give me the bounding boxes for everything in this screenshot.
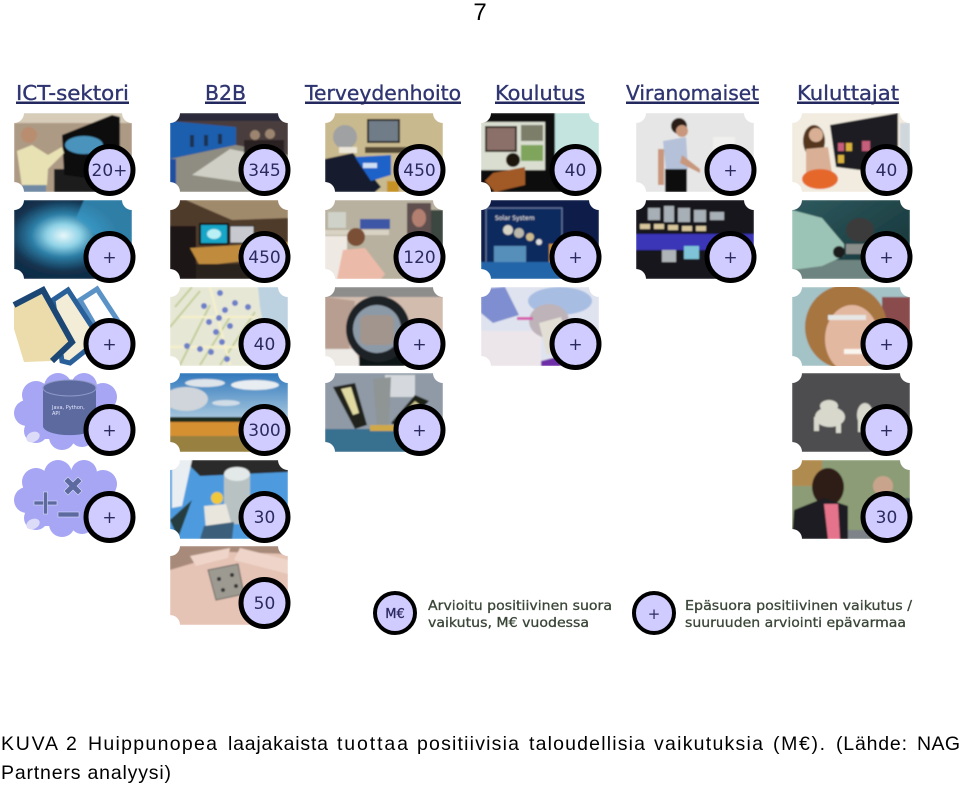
legend badge: plus (634, 593, 674, 633)
column: Viranomaiset (626, 81, 759, 280)
badge: plus: + (102, 508, 117, 528)
caption: laajakaista (228, 733, 328, 755)
tile: database cloud (14, 373, 133, 454)
heading: Terveydenhoito: Terveydenhoito (304, 81, 461, 105)
badge: plus: + (102, 421, 117, 441)
column: ICT-sektori (14, 81, 133, 540)
tile: video consultation, 450 (325, 113, 443, 194)
badge: 300: 300 (248, 421, 281, 441)
legend text: indirect impact: Epäsuora positiivinen vaikutus / (685, 598, 912, 614)
legend badge: M€ (375, 593, 415, 633)
tile: solar system screen: Solar System (495, 215, 535, 222)
heading: Viranomaiset: Viranomaiset (626, 81, 759, 105)
heading: ICT-sektori: ICT-sektori (16, 81, 129, 105)
badge: 40: 40 (254, 335, 275, 355)
badge: plus: + (412, 421, 427, 441)
tile: chip in palm, 50 (170, 546, 288, 626)
badge: plus: + (568, 335, 583, 355)
tile: lab researcher (481, 287, 599, 368)
legend text: direct impact: vaikutus, M€ vuodessa (428, 615, 589, 631)
caption: Partners analyysi) (1, 762, 171, 784)
badge: 120: 120 (403, 248, 436, 268)
badge: 450: 450 (403, 161, 436, 181)
legend text: direct impact (428, 598, 612, 631)
legend text: indirect impact: suuruuden arviointi epävarmaa (685, 615, 906, 631)
caption: NAG (917, 733, 960, 755)
legend text: indirect impact (685, 598, 912, 631)
heading: Kuluttajat: Kuluttajat (797, 81, 899, 105)
badge: plus: + (879, 335, 894, 355)
tile: surgical robot (325, 373, 443, 454)
column: Kuluttajat (792, 81, 910, 540)
tile: control room (636, 200, 754, 280)
badge: plus: + (723, 161, 738, 181)
tile: data tunnel (14, 200, 133, 280)
tile: field and sky, 300 (164, 373, 288, 454)
tile: math cloud (14, 460, 133, 540)
badge: plus: + (412, 335, 427, 355)
caption: (Lähde: (836, 733, 907, 755)
tile: woman with smart TV, 40 (792, 113, 910, 194)
badge: plus: + (102, 335, 117, 355)
tile: hospital patient, 120 (325, 200, 443, 280)
column: B2B (164, 81, 288, 626)
tile: map with pins, 40 (170, 287, 288, 368)
badge: 450: 450 (248, 248, 281, 268)
heading: B2B: B2B (205, 81, 246, 105)
tile: operator desk, 450 (170, 200, 288, 280)
badge: plus: + (879, 421, 894, 441)
column: Terveydenhoito (304, 81, 461, 454)
tile: speeding car (792, 200, 910, 280)
tile: documents icon (14, 289, 133, 368)
caption: vaikutuksia (654, 733, 763, 755)
legend badge: plus: + (648, 605, 660, 623)
badge: 345: 345 (248, 161, 281, 181)
tile: video conference room, 345 (170, 113, 288, 194)
tile: database cloud: API (52, 411, 60, 417)
heading: Koulutus: Koulutus (495, 81, 585, 105)
legend badge: M€: M€ (385, 607, 405, 622)
caption: Huippunopea (88, 733, 217, 755)
tile: 3D printed figures (792, 373, 910, 454)
tile: man at display, 20+ (14, 113, 133, 194)
tile: heart-rate watch (325, 287, 443, 368)
tile: database cloud: Java, Python, (51, 405, 85, 411)
caption: 2 (66, 733, 77, 755)
tile: woman with smart glasses (792, 285, 910, 373)
badge: 30: 30 (876, 508, 897, 528)
badge: plus: + (568, 248, 583, 268)
badge: 50: 50 (254, 594, 275, 614)
caption: KUVA (1, 733, 58, 755)
tile: industrial worker, 30 (170, 460, 288, 540)
caption: taloudellisia (529, 733, 645, 755)
caption: tuottaa (337, 733, 408, 755)
badge: 20+: 20+ (92, 161, 127, 181)
caption (1, 733, 960, 784)
badge: 40: 40 (876, 161, 897, 181)
badge: plus: + (723, 248, 738, 268)
tile: presenter woman (636, 113, 754, 194)
badge: plus: + (879, 248, 894, 268)
caption: (M€). (773, 733, 825, 755)
badge: 40: 40 (565, 161, 586, 181)
caption: positiivisia (417, 733, 519, 755)
legend (375, 593, 912, 633)
tile: solar system screen (481, 200, 599, 280)
tile: remote classroom, 40 (481, 113, 599, 194)
column: Koulutus (481, 81, 599, 368)
tile: two people with tablet, 30 (792, 460, 910, 540)
badge: plus: + (102, 248, 117, 268)
legend text: direct impact: Arvioitu positiivinen suora (428, 598, 612, 614)
badge: 30: 30 (254, 508, 275, 528)
